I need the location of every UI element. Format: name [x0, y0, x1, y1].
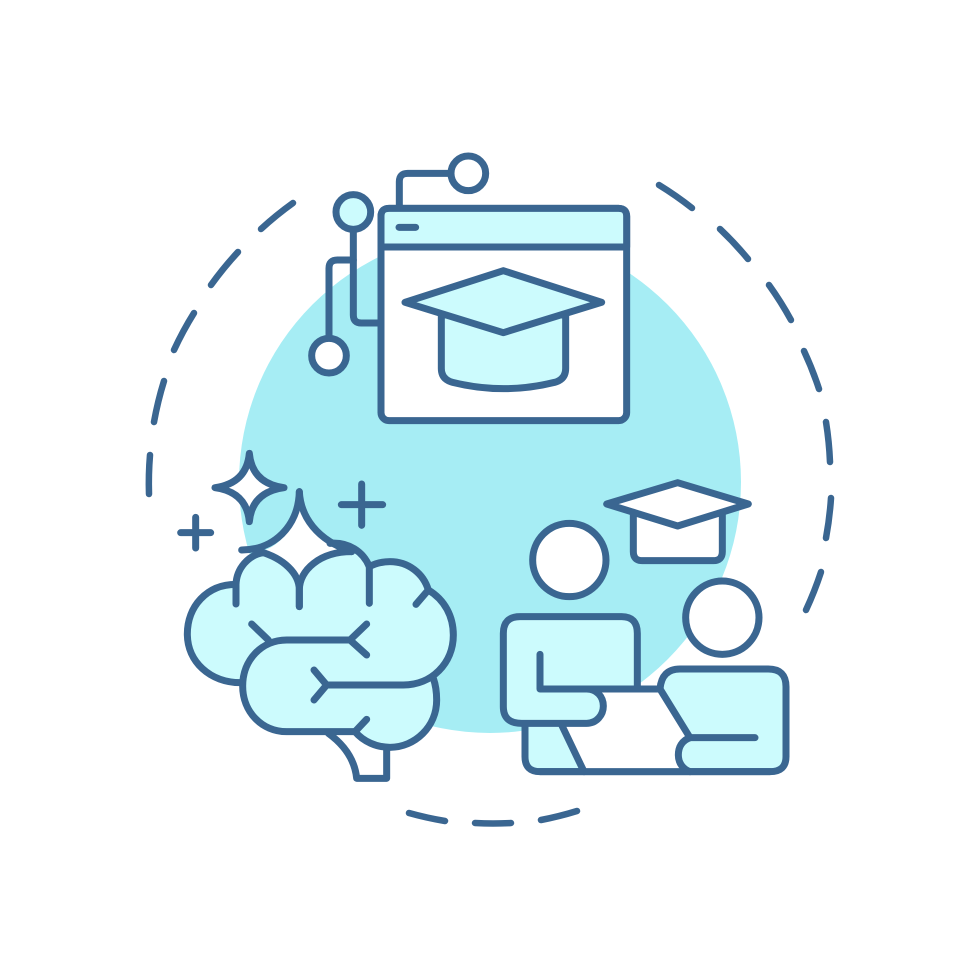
- floating graduation cap: [607, 483, 748, 561]
- students with laptop and cap: [503, 483, 786, 772]
- left student body fill: [503, 617, 637, 723]
- large sparkle: [260, 492, 352, 607]
- window title bar: [381, 208, 627, 247]
- small sparkle: [215, 453, 284, 522]
- laptop screen: [562, 689, 690, 772]
- left student body outline: [503, 617, 660, 723]
- background circle: [239, 231, 741, 733]
- brain fill: [187, 543, 453, 747]
- laptop edges and right arm: [540, 689, 770, 772]
- dashed outer ring: [149, 185, 831, 823]
- graduation cap: [405, 271, 602, 389]
- window frame: [381, 208, 627, 421]
- circuit connectors: [329, 173, 450, 337]
- small plus: [181, 517, 211, 548]
- browser window with graduation cap: [312, 156, 627, 421]
- large plus: [341, 484, 383, 525]
- circuit nodes: [312, 156, 486, 373]
- brain outlines: [187, 492, 453, 747]
- right student body: [525, 669, 786, 772]
- brain with sparkles: [181, 453, 453, 778]
- student head right: [686, 581, 759, 654]
- student head left: [533, 523, 606, 597]
- brain stem: [328, 733, 387, 778]
- title bar dash: [399, 217, 416, 238]
